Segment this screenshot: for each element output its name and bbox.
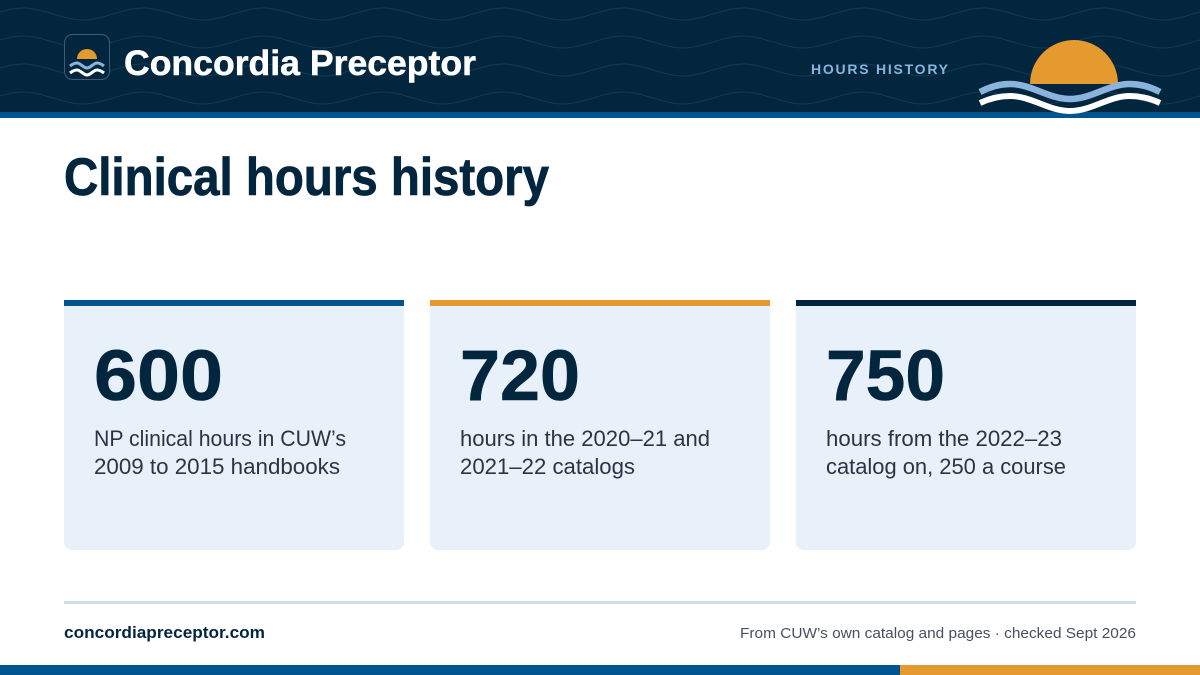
title: Clinical hours history — [64, 148, 549, 207]
stat: 750: 750 — [826, 337, 945, 416]
description: 750: catalog on, 250 a course — [826, 454, 1066, 479]
brand name: Concordia Preceptor — [124, 44, 476, 83]
panel: 720 hours — [430, 300, 770, 550]
header label: HOURS HISTORY — [811, 61, 949, 77]
footer colour bar — [0, 665, 1200, 675]
description: 720: 2021–22 catalogs — [460, 454, 635, 479]
stat: 720: 720 — [460, 337, 580, 416]
header banner — [0, 0, 1200, 118]
description: 720: hours in the 2020–21 and — [460, 426, 710, 451]
description: 600: NP clinical hours in CUW’s — [94, 426, 346, 451]
icon: sunset over waves — [980, 40, 1160, 111]
icon: logo badge — [64, 34, 110, 80]
panel: 600 hours — [64, 300, 404, 550]
panel: 750 hours — [796, 300, 1136, 550]
footer website: concordiapreceptor.com — [64, 623, 265, 642]
description: 750: hours from the 2022–23 — [826, 426, 1062, 451]
description: 600: 2009 to 2015 handbooks — [94, 454, 340, 479]
stat: 600: 600 — [94, 337, 223, 416]
footer source note: From CUW’s own catalog and pages · checked Sept 2026 — [740, 625, 1136, 642]
